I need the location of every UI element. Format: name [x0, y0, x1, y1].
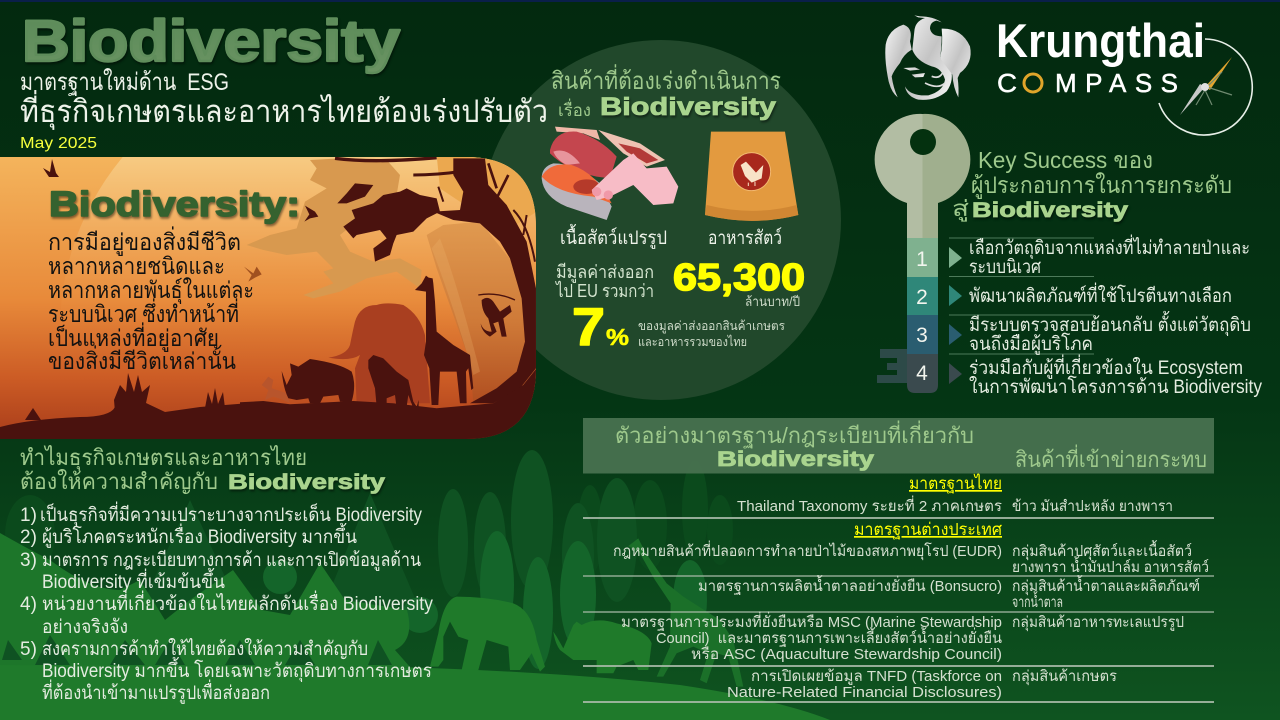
key success heading: Biodiversity — [972, 198, 1128, 222]
ground — [0, 665, 830, 720]
row: Bonsucro — [698, 575, 1200, 611]
why section list: 4) — [20, 594, 37, 615]
why section list: สงครามการค้าทำให้ไทยต้องให้ความสำคัญกับ — [42, 638, 368, 660]
stat: 65,300: ล้านบาท/ปี — [745, 294, 800, 309]
pale acacia tree — [247, 158, 422, 298]
definition text: หลากหลายพันธุ์ในแต่ละ — [48, 277, 254, 304]
why section list: 3) — [20, 550, 37, 571]
icon: compass — [1159, 39, 1252, 135]
key success heading — [952, 147, 1232, 222]
item 3: มีระบบตรวจสอบย้อนกลับ ตั้งแต่วัตถุดิบ — [969, 311, 1251, 337]
item 3: จนถึงมือผู้บริโภค — [969, 332, 1093, 355]
giraffe — [415, 276, 473, 405]
stat: 7%: และอาหารรวมของไทย — [638, 335, 747, 349]
why section list: Biodiversity ที่เข้มข้นขึ้น — [42, 568, 225, 593]
key numbers: 1 — [916, 248, 928, 271]
table header — [583, 418, 1214, 474]
panel: sunset savanna — [0, 157, 536, 439]
definition text: ของสิ่งมีชีวิตเหล่านั้น — [48, 345, 236, 374]
why section list: อย่างจริงจัง — [42, 617, 128, 638]
birds right — [304, 206, 318, 222]
subtitle: ที่ธุรกิจเกษตรและอาหารไทยต้องเร่งปรับตัว — [20, 90, 548, 131]
item 1 — [949, 234, 1250, 278]
row: EUDR: กฎหมายสินค้าที่ปลอดการทำลายป่าไม้ของสหภาพยุโรป (EUDR) — [613, 540, 1002, 561]
why section heading: ทำไมธุรกิจเกษตรและอาหารไทย — [20, 445, 307, 471]
item 4: ร่วมมือกับผู้ที่เกี่ยวข้องใน Ecosystem — [969, 354, 1243, 379]
why section list — [20, 501, 433, 704]
item 1: ระบบนิเวศ — [969, 257, 1041, 278]
icon: processed meat — [542, 127, 678, 220]
icon: animal feed bag — [705, 132, 798, 221]
row: MSC and ASC: กลุ่มสินค้าอาหารทะเลแปรรูป — [1012, 614, 1184, 632]
key success heading: Key Success ของ — [978, 147, 1153, 173]
key numbers: 4 — [916, 362, 928, 385]
panel: products content — [542, 64, 805, 357]
row: MSC and ASC: หรือ ASC (Aquaculture Stewardship Council) — [691, 646, 1002, 663]
logo: Krungthai Compass: C — [997, 68, 1017, 98]
row: Bonsucro: จากน้ำตาล — [1012, 591, 1063, 611]
key segment 4 — [907, 354, 938, 393]
tiger — [368, 355, 419, 408]
ground left — [0, 403, 250, 440]
row: TNFD: กลุ่มสินค้าเกษตร — [1012, 668, 1117, 686]
why section heading: ต้องให้ความสำคัญกับ — [20, 469, 218, 494]
row: Bonsucro: กลุ่มสินค้าน้ำตาลและผลิตภัณฑ์ — [1012, 575, 1200, 596]
row: TNFD: การเปิดเผยข้อมูล TNFD (Taskforce on — [751, 668, 1002, 685]
subtitle: มาตรฐานใหม่ด้าน ESG — [20, 68, 229, 96]
products heading: เรื่อง — [558, 98, 591, 120]
title: Biodiversity — [22, 9, 400, 74]
Thai standards — [737, 473, 1173, 515]
Thai standards: Thailand Taxonomy ระยะที่ 2 ภาคเกษตร — [737, 495, 1002, 515]
stat: 7%: % — [606, 324, 629, 350]
foreign standards: มาตรฐานต่างประเทศ — [854, 520, 1002, 540]
definition heading: Biodiversity: — [49, 185, 300, 224]
table header: Biodiversity — [717, 447, 874, 471]
why section list: ที่ต้องนำเข้ามาแปรรูปเพื่อส่งออก — [42, 679, 270, 704]
key success heading: สู่ — [952, 196, 970, 222]
stat: 65,300: 65,300 — [673, 257, 805, 299]
foreign standards — [613, 520, 1209, 701]
pale trunk — [427, 222, 537, 403]
logo: Krungthai Compass — [996, 14, 1252, 135]
why section list: 1) — [20, 505, 37, 526]
elephant silhouette — [430, 538, 743, 687]
stat: 7% — [572, 298, 785, 357]
export value text — [554, 262, 654, 301]
definition text: ระบบนิเวศ ซึ่งทำหน้าที่ — [48, 298, 239, 327]
products heading — [551, 64, 781, 121]
main tree — [337, 158, 536, 403]
item 4 — [949, 354, 1262, 398]
definition text: การมีอยู่ของสิ่งมีชีวิต — [48, 226, 241, 256]
logo: Krungthai Compass: Krungthai — [996, 14, 1205, 67]
row: MSC and ASC: Council) และมาตรฐานการเพาะเลี้ยงสัตว์น้ำอย่างยั่งยืน — [656, 627, 1002, 647]
row: EUDR — [613, 540, 1209, 576]
product labels: เนื้อสัตว์แปรรูป — [560, 224, 667, 249]
definition text: เป็นแหล่งที่อยู่อาศัย — [48, 322, 219, 352]
row: MSC and ASC: มาตรฐานการประมงที่ยั่งยืนหรือ MSC (Marine Stewardship — [621, 611, 1002, 631]
item 2: พัฒนาผลิตภัณฑ์ที่ใช้โปรตีนทางเลือก — [969, 282, 1232, 307]
bright hills and bushes — [0, 533, 410, 667]
key segment 2 — [907, 277, 938, 315]
why section list: เป็นธุรกิจที่มีความเปราะบางจากประเด็น Biodiversity — [40, 501, 422, 527]
definition text — [48, 226, 254, 374]
icon: gold O — [1024, 74, 1042, 92]
why section list: Biodiversity มากขึ้น โดยเฉพาะวัตถุดิบทางการเกษตร — [42, 657, 432, 683]
products heading: สินค้าที่ต้องเร่งดำเนินการ — [551, 64, 781, 95]
logo: Krungthai Compass: MPASS — [1055, 68, 1178, 98]
key segment 1 — [907, 238, 938, 277]
stat: 7%: 7 — [572, 298, 605, 357]
forest silhouette background — [0, 450, 830, 720]
why section list: 5) — [20, 639, 37, 660]
ground right — [240, 368, 537, 445]
row: TNFD — [727, 668, 1117, 701]
Thai standards: ข้าว มันสำปะหลัง ยางพารา — [1012, 498, 1173, 515]
row: Bonsucro: มาตรฐานการผลิตน้ำตาลอย่างยั่งยืน (Bonsucro) — [698, 575, 1002, 595]
date: May 2025 — [20, 135, 97, 152]
key numbers: 3 — [916, 324, 928, 347]
table header: ตัวอย่างมาตรฐาน/กฎระเบียบที่เกี่ยวกับ — [615, 420, 974, 449]
top navy line — [0, 0, 1280, 2]
rhino silhouette — [553, 620, 652, 673]
Thai standards: มาตรฐานไทย — [909, 473, 1002, 494]
icon: Krungthai emblem — [885, 15, 971, 100]
why section heading — [20, 445, 385, 494]
bird left — [43, 159, 59, 177]
icon: key — [875, 114, 970, 393]
grass — [25, 373, 225, 420]
product labels — [560, 224, 782, 249]
key segment 3 — [907, 315, 938, 354]
why section heading: Biodiversity — [228, 470, 385, 494]
key numbers — [916, 248, 928, 385]
sun — [68, 157, 536, 270]
giraffe silhouette — [628, 538, 743, 687]
stat: 7%: ของมูลค่าส่งออกสินค้าเกษตร — [638, 319, 785, 334]
key success list — [949, 234, 1262, 398]
panel: standards table — [583, 418, 1214, 702]
row: EUDR: กลุ่มสินค้าปศุสัตว์และเนื้อสัตว์ — [1012, 540, 1192, 561]
key teeth — [877, 349, 907, 383]
monkey — [478, 294, 515, 337]
products heading: Biodiversity — [600, 93, 776, 121]
why section list: ผู้บริโภคตระหนักเรื่อง Biodiversity มากขึ้น — [42, 523, 357, 548]
definition text: หลากหลายชนิดและ — [48, 253, 225, 279]
key success heading: ผู้ประกอบการในการยกระดับ — [971, 172, 1232, 199]
why section list: หน่วยงานที่เกี่ยวข้องในไทยผลักดันเรื่อง Biodiversity — [42, 590, 433, 615]
row: MSC and ASC — [621, 611, 1184, 663]
export value text: ไป EU รวมกว่า — [554, 280, 654, 301]
deer — [262, 377, 290, 403]
elephant — [328, 303, 430, 403]
row: EUDR: ยางพารา น้ำมันปาล์ม อาหารสัตว์ — [1012, 556, 1209, 576]
subtitle — [20, 68, 548, 131]
table header: สินค้าที่เข้าข่ายกระทบ — [1015, 444, 1207, 472]
why section list: มาตรการ กฎระเบียบทางการค้า และการเปิดข้อมูลด้าน — [42, 549, 421, 571]
why section list: 2) — [20, 527, 37, 548]
item 3 — [949, 311, 1251, 355]
export value text: มีมูลค่าส่งออก — [556, 262, 654, 283]
rhino — [282, 359, 354, 403]
row: TNFD: Nature-Related Financial Disclosures) — [727, 684, 1002, 701]
key numbers: 2 — [916, 286, 928, 309]
product labels: อาหารสัตว์ — [708, 227, 782, 249]
panel: products circle background — [481, 40, 841, 400]
